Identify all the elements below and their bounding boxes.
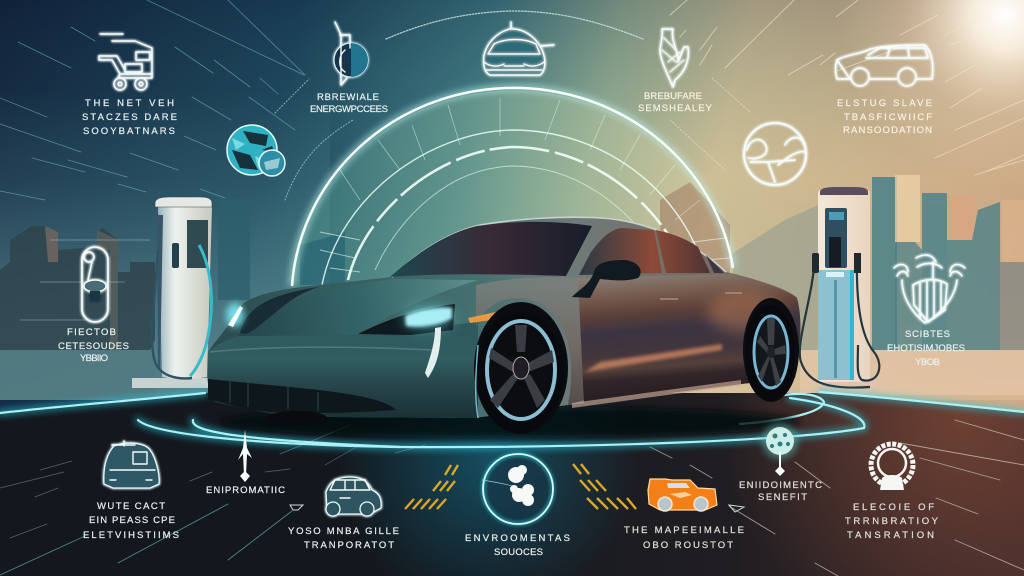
text block: OBO ROUSTOT: [643, 540, 733, 551]
renewable energy block: [310, 22, 388, 115]
electric transport gear block: [845, 444, 939, 541]
mirror: [572, 260, 641, 298]
left charging station: [132, 197, 212, 388]
charger base: [820, 380, 877, 390]
icon: orange SUV: [648, 479, 717, 511]
background city: left: [0, 198, 250, 400]
text block: YBBIIO: [80, 353, 108, 364]
sill: [572, 380, 741, 408]
text block: THE MAPEEIMALLE: [624, 525, 744, 536]
charger blue panel: [818, 270, 853, 380]
icon: small teal car: [326, 477, 381, 516]
charger side slot: [157, 215, 163, 370]
top right text block with leaf icon: [638, 29, 713, 114]
text block: EHOTISIMJOBES: [887, 343, 965, 354]
door side panel: [578, 274, 800, 404]
text block: TRANPORATOT: [304, 540, 394, 551]
text block: [638, 91, 713, 114]
text block: [58, 327, 129, 364]
top right SUV block: [836, 45, 933, 136]
text block: STACZES DARE: [82, 112, 177, 123]
text block: [845, 502, 939, 541]
background light streaks: [0, 0, 1024, 200]
text block: BREBUFARE: [644, 91, 702, 102]
floor light rings: [0, 392, 1024, 447]
text block: YBOB: [915, 357, 940, 368]
text block: [624, 525, 744, 551]
icon: SUV outline: [836, 45, 933, 86]
text block: ENIPROMATIIC: [206, 485, 285, 496]
icon: heart with palms: [894, 255, 965, 323]
car body: [208, 217, 800, 418]
floor streaks: [0, 420, 1024, 576]
text block: ENVROOMENTAS: [465, 533, 570, 544]
text block: YOSO MNBA GILLE: [288, 526, 399, 537]
environmental benefit block: [739, 423, 822, 503]
text block: [82, 98, 177, 137]
bottom left van block: [83, 441, 179, 541]
text block: TBASFICWIICF: [844, 112, 932, 123]
icon: trees in ring: [482, 454, 553, 524]
top left block: cart icon and text: [82, 34, 177, 137]
icon: road scene circle: [744, 123, 806, 185]
charger body: [158, 207, 212, 379]
text block: SOOYBATNARS: [83, 126, 175, 137]
rear wheel: [743, 298, 799, 402]
text block: [837, 98, 932, 136]
text block: SEMSHEALEY: [638, 103, 713, 114]
front grille: [208, 379, 396, 413]
text block: ELETVIHSTIIMS: [83, 530, 179, 541]
icon: charging pill: [82, 247, 108, 322]
text block: SOUOCES: [494, 547, 543, 558]
text block: EIN PEASS CPE: [89, 515, 175, 526]
text block: TRRNBRATIOY: [845, 516, 939, 527]
text block: [83, 501, 179, 541]
charger body: [818, 190, 870, 382]
charger cap: [820, 187, 868, 195]
text block: RBREWIALE: [317, 92, 379, 103]
text block: WUTE CACT: [97, 501, 165, 512]
central holographic arch: [292, 88, 733, 330]
text block: SENEFIT: [758, 492, 807, 503]
door handles: [660, 293, 742, 299]
text block: ELECOIE OF: [853, 502, 934, 513]
charger base: [132, 378, 208, 388]
car shadow: [220, 406, 800, 438]
front fascia: [208, 322, 478, 418]
headlight wedge: [358, 304, 455, 335]
text block: [887, 329, 965, 368]
icon: top center car: [484, 22, 554, 75]
text block: THE NET VEH: [85, 98, 174, 109]
yellow road dashes right: [573, 464, 636, 509]
floor: [0, 393, 1024, 576]
headlight: [404, 307, 452, 329]
text block: CETESOUDES: [58, 341, 129, 352]
teal photo circles: [227, 125, 285, 176]
front tire shadow: [267, 411, 327, 425]
hood: [238, 279, 478, 336]
text block: [288, 526, 399, 551]
arrow turbine block: [206, 430, 285, 496]
orange SUV block: [624, 479, 744, 551]
windshield: [390, 222, 592, 277]
background city: right: [730, 175, 1024, 395]
small car block: [288, 477, 399, 551]
left middle block: [58, 247, 129, 364]
text block: ENIIDOIMENTC: [739, 480, 822, 491]
icon: renewable energy globe: [334, 22, 368, 85]
icon: leaves: [660, 29, 688, 87]
icon: gear steering wheel: [871, 444, 913, 490]
side windows: [579, 228, 724, 275]
text block: SCIBTES: [905, 329, 950, 340]
rear quarter glow: [707, 292, 783, 332]
icon: turbine arrow: [238, 430, 252, 482]
electric car: [208, 217, 800, 438]
text block: FIECTOB: [67, 327, 116, 338]
text block: [465, 533, 570, 558]
charger cables: [152, 245, 211, 378]
icon: tree pin: [762, 423, 798, 476]
daytime running light: [425, 327, 441, 378]
front wheel: [474, 302, 568, 434]
left headlight: [226, 303, 244, 327]
charger cables: [800, 254, 879, 388]
text block: [739, 480, 822, 503]
right charging station: [800, 187, 879, 390]
yellow road dashes left: [405, 465, 458, 509]
text block: [310, 92, 388, 115]
text block: TANSRATION: [847, 530, 934, 541]
door orange reflection: [585, 344, 722, 372]
center bottom environment block: [465, 454, 570, 558]
right middle block: [887, 255, 965, 368]
roof highlight: [392, 217, 726, 277]
chevron marks: [290, 505, 744, 512]
icon: van: [104, 441, 159, 488]
orange side marker: [468, 312, 496, 323]
text block: ELSTUG SLAVE: [837, 98, 932, 109]
text block: RANSOODATION: [843, 125, 932, 136]
icon: cargo cart: [99, 34, 152, 90]
fender: [476, 277, 584, 405]
charger screen: [825, 208, 847, 268]
charger cap: [155, 197, 212, 207]
charger screen: [187, 220, 208, 268]
text block: ENERGWPCCEES: [310, 104, 388, 115]
